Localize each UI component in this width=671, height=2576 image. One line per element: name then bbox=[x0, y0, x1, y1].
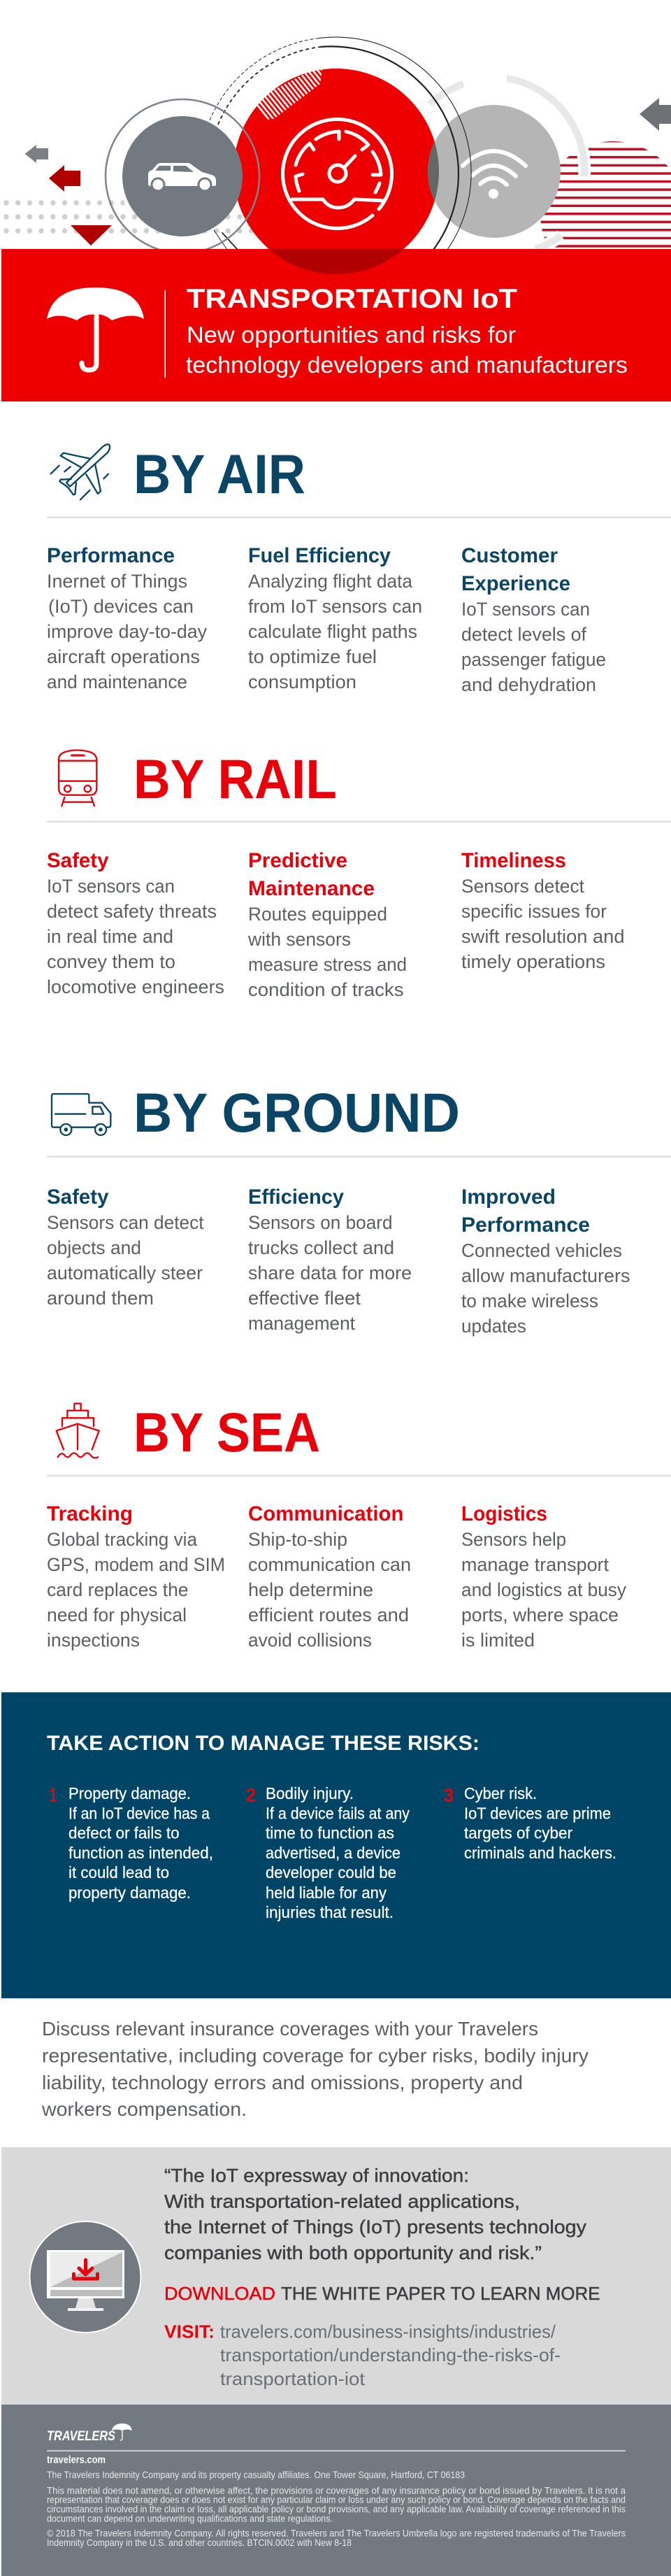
heading: BY SEA bbox=[134, 1401, 320, 1463]
column: fuel efficiency: to optimize fuel bbox=[248, 646, 377, 667]
panel: by sea bbox=[47, 1401, 671, 1651]
risk 2: injuries that result. bbox=[266, 1903, 394, 1921]
panel: title band bbox=[1, 249, 671, 401]
text block: discuss coverages: representative, including coverage for cyber risks, bodily injury bbox=[42, 2045, 589, 2066]
risk 2 bbox=[246, 1784, 410, 1921]
column: logistics bbox=[461, 1502, 626, 1651]
column: performance: and maintenance bbox=[47, 671, 187, 692]
panel: by ground bbox=[47, 1081, 671, 1337]
column: tracking: Tracking bbox=[47, 1502, 133, 1525]
column: efficiency: effective fleet bbox=[248, 1288, 361, 1309]
column: tracking: inspections bbox=[47, 1630, 140, 1651]
column: tracking: need for physical bbox=[47, 1604, 187, 1625]
column: customer experience: Experience bbox=[461, 572, 570, 595]
visit link: VISIT: bbox=[164, 2321, 215, 2342]
column: improved performance: updates bbox=[461, 1316, 526, 1337]
heading: BY AIR bbox=[134, 443, 305, 505]
hero illustration bbox=[3, 36, 671, 249]
heading: BY RAIL bbox=[134, 748, 337, 810]
column: safety bbox=[47, 849, 224, 997]
risk 1: 1 bbox=[49, 1784, 57, 1806]
column: efficiency: trucks collect and bbox=[248, 1237, 394, 1258]
subtitle: technology developers and manufacturers bbox=[186, 353, 628, 378]
column: fuel efficiency: calculate flight paths bbox=[248, 621, 417, 642]
column: tracking: GPS, modem and SIM bbox=[47, 1554, 225, 1575]
column: logistics: Logistics bbox=[461, 1502, 547, 1525]
column: safety bbox=[47, 1186, 204, 1309]
risk 2: developer could be bbox=[266, 1863, 396, 1881]
text block: discuss coverages: liability, technology errors and omissions, property and bbox=[42, 2072, 523, 2093]
column: safety: locomotive engineers bbox=[47, 976, 224, 997]
column: customer experience: passenger fatigue bbox=[461, 649, 606, 670]
disclaimer: document can depend on underwriting qualifications and state regulations. bbox=[47, 2512, 333, 2524]
column: logistics: ports, where space bbox=[461, 1604, 619, 1625]
column: performance: improve day-to-day bbox=[47, 621, 207, 642]
column: safety: Sensors can detect bbox=[47, 1212, 204, 1233]
column: efficiency: management bbox=[248, 1313, 355, 1334]
column: safety: automatically steer bbox=[47, 1262, 203, 1283]
column: communication bbox=[248, 1502, 411, 1651]
column: fuel efficiency: consumption bbox=[248, 671, 356, 692]
visit link: transportation/understanding-the-risks-of- bbox=[220, 2344, 561, 2365]
column: performance: (IoT) devices can bbox=[48, 596, 194, 617]
risk 1: property damage. bbox=[68, 1884, 191, 1902]
title: TRANSPORTATION IoT bbox=[187, 284, 517, 314]
panel: by air bbox=[47, 443, 671, 695]
column: customer experience: detect levels of bbox=[461, 624, 586, 645]
icon: monitor download bbox=[29, 2221, 141, 2333]
column: predictive maintenance: measure stress and bbox=[248, 954, 407, 975]
red speedometer circle bbox=[236, 69, 435, 249]
logo: travelers bbox=[47, 2424, 132, 2444]
column: predictive maintenance: Routes equipped bbox=[248, 904, 387, 925]
column: customer experience: and dehydration bbox=[461, 674, 596, 695]
quote bbox=[164, 2165, 587, 2263]
quote: companies with both opportunity and risk.” bbox=[164, 2242, 542, 2263]
column: efficiency: Efficiency bbox=[248, 1186, 344, 1209]
risk 2: If a device fails at any bbox=[266, 1805, 410, 1823]
column: predictive maintenance bbox=[247, 849, 407, 1000]
column: tracking: card replaces the bbox=[47, 1579, 189, 1600]
visit link: travelers.com/business-insights/industries/ bbox=[220, 2321, 556, 2342]
car circle bbox=[106, 99, 259, 253]
icon: car bbox=[148, 163, 216, 192]
column: customer experience bbox=[461, 544, 606, 695]
column: fuel efficiency bbox=[248, 544, 422, 692]
column: improved performance bbox=[461, 1186, 630, 1337]
column: predictive maintenance: with sensors bbox=[247, 929, 351, 950]
column: safety: objects and bbox=[47, 1237, 141, 1258]
column: safety: detect safety threats bbox=[47, 901, 217, 922]
column: efficiency bbox=[248, 1186, 412, 1334]
icon: umbrella bbox=[47, 287, 144, 370]
wifi circle bbox=[428, 105, 561, 238]
icon: train bbox=[59, 750, 96, 806]
column: efficiency: share data for more bbox=[248, 1262, 412, 1283]
risk 2: advertised, a device bbox=[266, 1844, 401, 1862]
icon: truck bbox=[52, 1094, 110, 1135]
column: improved performance: allow manufacturers bbox=[461, 1265, 630, 1286]
column: timeliness bbox=[461, 849, 625, 972]
column: performance: Performance bbox=[47, 544, 175, 567]
column: performance: Inernet of Things bbox=[47, 571, 187, 592]
column: communication: communication can bbox=[248, 1554, 411, 1575]
column: communication: Ship-to-ship bbox=[248, 1529, 347, 1550]
risk 1: defect or fails to bbox=[68, 1824, 180, 1842]
column: tracking: Global tracking via bbox=[47, 1529, 198, 1550]
column: improved performance: Connected vehicles bbox=[461, 1240, 622, 1261]
download call to action: DOWNLOAD bbox=[164, 2283, 275, 2304]
risk 3 bbox=[444, 1784, 616, 1862]
column: customer experience: IoT sensors can bbox=[461, 599, 590, 620]
column: fuel efficiency: from IoT sensors can bbox=[248, 596, 422, 617]
column: safety: in real time and bbox=[47, 926, 173, 947]
column: customer experience: Customer bbox=[461, 544, 558, 567]
icon: wifi bbox=[463, 151, 526, 199]
visit link bbox=[164, 2321, 561, 2389]
risk 1 bbox=[49, 1784, 213, 1902]
quote: “The IoT expressway of innovation: bbox=[164, 2165, 469, 2186]
icon: plane bbox=[51, 444, 110, 499]
column: predictive maintenance: Predictive bbox=[248, 849, 347, 872]
hatch bbox=[257, 70, 322, 119]
column: logistics: and logistics at busy bbox=[461, 1579, 626, 1600]
column: timeliness: Sensors detect bbox=[461, 876, 584, 897]
copyright: Indemnity Company in the U.S. and other countries. BTCIN.0002 with New 8-18 bbox=[47, 2537, 352, 2548]
column: timeliness: Timeliness bbox=[461, 849, 566, 872]
text block: discuss coverages: Discuss relevant insurance coverages with your Travelers bbox=[42, 2018, 538, 2040]
risk 2: 2 bbox=[246, 1784, 256, 1806]
column: safety: around them bbox=[47, 1288, 154, 1309]
column: timeliness: swift resolution and bbox=[461, 926, 625, 947]
visit link: transportation-iot bbox=[220, 2368, 366, 2389]
arrow: down triangle bbox=[71, 225, 112, 245]
address: The Travelers Indemnity Company and its property casualty affiliates. One Tower Square, Hartford, CT 06183 bbox=[47, 2469, 465, 2480]
risk 2: Bodily injury. bbox=[266, 1784, 354, 1802]
quote: With transportation-related applications, bbox=[164, 2191, 520, 2212]
concentric arcs bbox=[210, 37, 471, 250]
column: efficiency: Sensors on board bbox=[248, 1212, 393, 1233]
disclaimer: This material does not amend, or otherwise affect, the provisions or coverages of any insurance policy or bond issued by Travelers. It is not a bbox=[47, 2484, 626, 2496]
risk 2: held liable for any bbox=[266, 1884, 387, 1902]
disclaimer bbox=[47, 2484, 626, 2524]
striped circle bbox=[531, 140, 671, 248]
column: logistics: is limited bbox=[461, 1630, 535, 1651]
column: communication: efficient routes and bbox=[248, 1604, 409, 1625]
column: safety: Safety bbox=[47, 849, 109, 872]
column: safety: IoT sensors can bbox=[47, 876, 175, 897]
arrow: small gray bbox=[25, 145, 48, 163]
risk 3: IoT devices are prime bbox=[464, 1805, 611, 1823]
column: performance bbox=[47, 544, 207, 692]
column: predictive maintenance: Maintenance bbox=[248, 877, 375, 900]
subtitle bbox=[186, 322, 628, 378]
panel: footer bbox=[1, 2405, 671, 2576]
column: logistics: manage transport bbox=[461, 1554, 609, 1575]
column: improved performance: Improved bbox=[461, 1186, 556, 1209]
risk 1: If an IoT device has a bbox=[68, 1805, 210, 1823]
arrow: dark red bbox=[49, 165, 80, 192]
heading: BY GROUND bbox=[134, 1081, 460, 1144]
column: performance: aircraft operations bbox=[47, 646, 200, 667]
text block: discuss coverages bbox=[41, 2018, 589, 2120]
heading: TAKE ACTION TO MANAGE THESE RISKS: bbox=[47, 1732, 479, 1755]
footer url: travelers.com bbox=[47, 2454, 106, 2466]
panel: by rail bbox=[47, 748, 671, 1000]
risk 3: targets of cyber bbox=[464, 1824, 572, 1842]
column: timeliness: specific issues for bbox=[461, 901, 607, 922]
arrow: large gray bbox=[640, 98, 671, 131]
column: timeliness: timely operations bbox=[461, 951, 605, 972]
icon: ship bbox=[57, 1404, 99, 1458]
column: communication: help determine bbox=[248, 1579, 373, 1600]
column: improved performance: Performance bbox=[461, 1214, 590, 1237]
light gray arcs around wifi bbox=[430, 78, 584, 249]
column: communication: Communication bbox=[248, 1502, 404, 1525]
column: safety: convey them to bbox=[47, 951, 175, 972]
subtitle: New opportunities and risks for bbox=[187, 322, 516, 348]
risk 2: time to function as bbox=[266, 1824, 394, 1842]
icon: speedometer bbox=[283, 120, 392, 229]
download call to action: THE WHITE PAPER TO LEARN MORE bbox=[281, 2283, 600, 2304]
column: improved performance: to make wireless bbox=[461, 1290, 598, 1311]
quote: the Internet of Things (IoT) presents technology bbox=[164, 2216, 587, 2237]
copyright bbox=[47, 2528, 626, 2548]
text block: discuss coverages: workers compensation. bbox=[41, 2098, 247, 2120]
dotted rows bbox=[3, 200, 253, 234]
risk 3: Cyber risk. bbox=[464, 1784, 537, 1802]
column: fuel efficiency: Fuel Efficiency bbox=[248, 544, 391, 567]
logo: travelers: TRAVELERS bbox=[47, 2429, 115, 2444]
column: communication: avoid collisions bbox=[248, 1630, 372, 1651]
risk 3: criminals and hackers. bbox=[464, 1844, 616, 1862]
panel: take action bbox=[1, 1693, 671, 1998]
column: tracking bbox=[47, 1502, 225, 1651]
panel: download bbox=[1, 2147, 671, 2405]
risk 1: function as intended, bbox=[68, 1844, 213, 1862]
column: safety: Safety bbox=[47, 1186, 109, 1209]
column: logistics: Sensors help bbox=[461, 1529, 566, 1550]
column: predictive maintenance: condition of tracks bbox=[248, 979, 404, 1000]
risk 1: Property damage. bbox=[68, 1784, 191, 1802]
risk 3: 3 bbox=[444, 1784, 454, 1806]
risk 1: it could lead to bbox=[68, 1863, 169, 1881]
column: fuel efficiency: Analyzing flight data bbox=[248, 571, 413, 592]
